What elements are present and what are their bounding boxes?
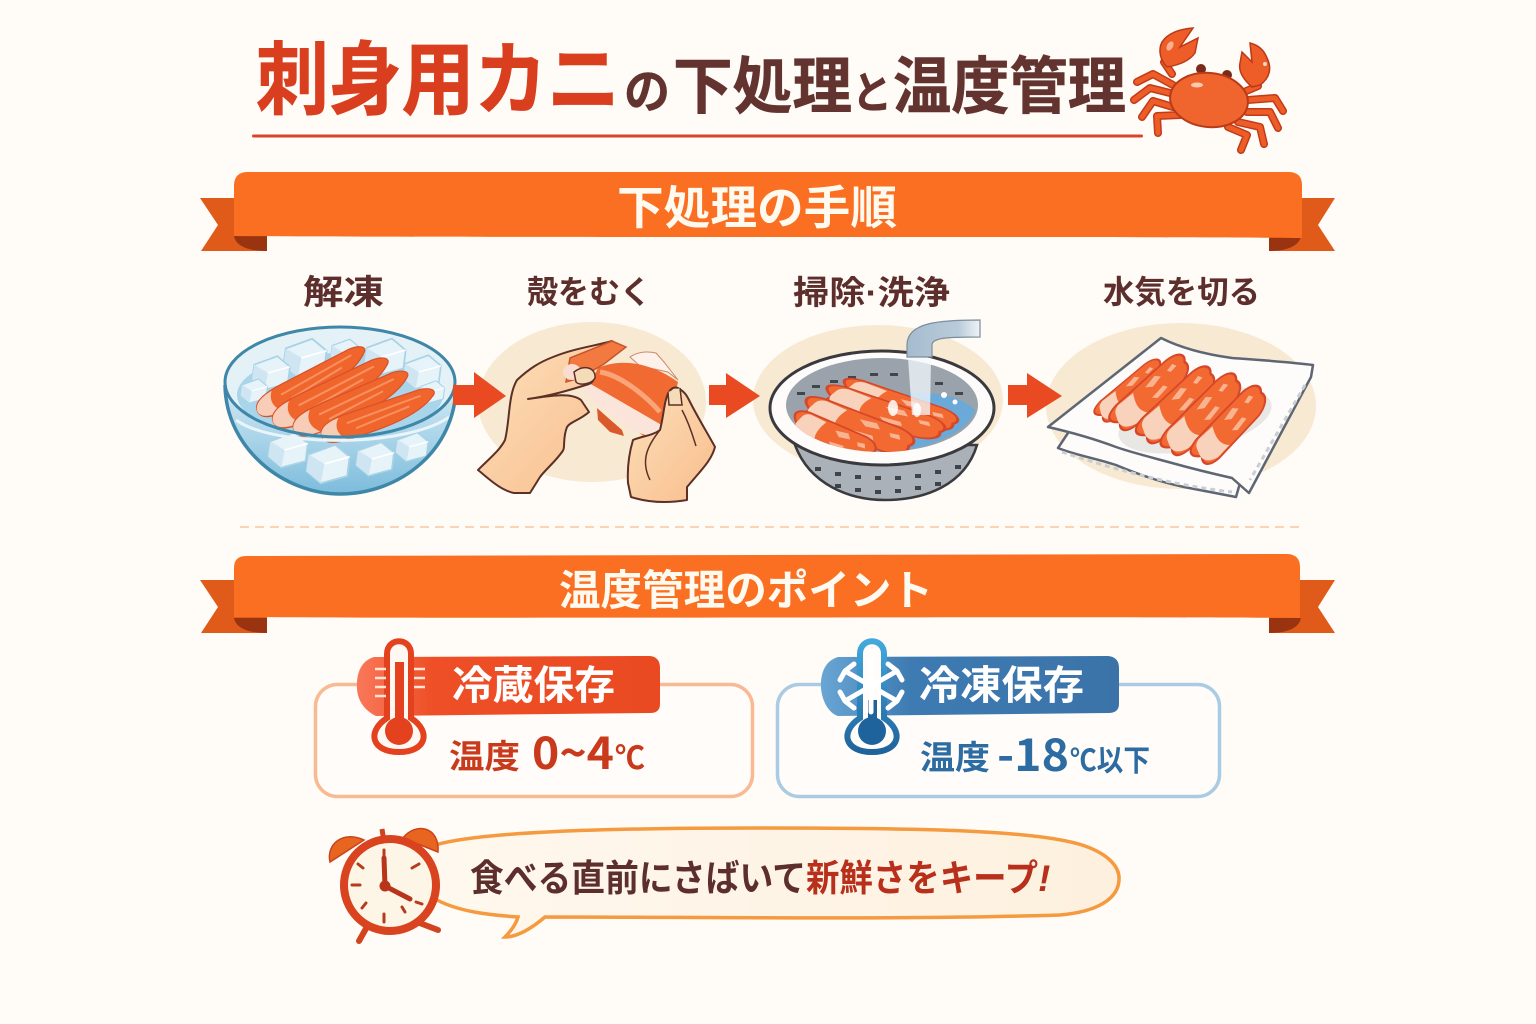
title underline [252,134,1143,138]
temperature: 0〜4℃ [449,718,645,782]
divider [240,526,1300,528]
title: 刺身用カニ [256,36,620,125]
header: 冷凍保存 [821,656,1119,716]
step label: 殻をむく: 殻をむく [527,274,651,310]
title: 下処理 [673,53,852,122]
temperature: -18℃以下 [920,720,1150,784]
title [256,36,1126,125]
illustration: crab on paper towel [1046,323,1316,497]
panel: 冷蔵保存 [316,641,752,796]
banner: 温度管理のポイント [200,554,1335,633]
banner: 下処理の手順: 下処理の手順 [617,182,897,234]
temperature: 0〜4℃: 0~4 [532,718,614,782]
icon: thermometer [374,641,425,752]
temperature: 0〜4℃: ℃ [615,733,645,779]
banner: 温度管理のポイント: 温度管理のポイント [559,567,933,614]
title: 温度管理 [893,53,1126,122]
illustration: bowl with ice and crab sticks [225,326,456,494]
icon: thermometer with snowflake [840,641,902,752]
banner: 下処理の手順 [200,172,1335,251]
temperature: -18℃以下: 温度 [920,739,990,776]
title: と [852,69,892,118]
callout: speech bubble: 新鮮さをキープ [806,858,1038,899]
icon: crab [1134,28,1283,150]
panel: 冷凍保存 [778,641,1220,796]
temperature: -18℃以下: -18 [997,720,1069,784]
illustration: hands peeling shell [478,322,715,502]
arrow 3 [1008,373,1062,418]
temperature: -18℃以下: ℃以下 [1070,736,1150,780]
step label: 解凍: 解凍 [303,274,384,312]
header: 冷蔵保存: 冷蔵保存 [452,664,615,708]
arrow 2 [709,373,760,418]
callout: speech bubble: ! [1038,858,1050,899]
arrow 1 [453,372,506,418]
header: 冷蔵保存 [357,656,660,716]
callout: speech bubble: 食べる直前にさばいて [470,858,806,899]
illustration: colander under faucet [753,320,1003,500]
icon: alarm clock [329,829,438,941]
temperature: 0〜4℃: 温度 [449,738,520,775]
callout: speech bubble [435,828,1119,937]
title: の [624,66,670,119]
step label: 水気を切る: 水気を切る [1103,274,1260,310]
header: 冷凍保存: 冷凍保存 [919,664,1084,708]
step label: 掃除・洗浄: 掃除·洗浄 [793,274,950,311]
